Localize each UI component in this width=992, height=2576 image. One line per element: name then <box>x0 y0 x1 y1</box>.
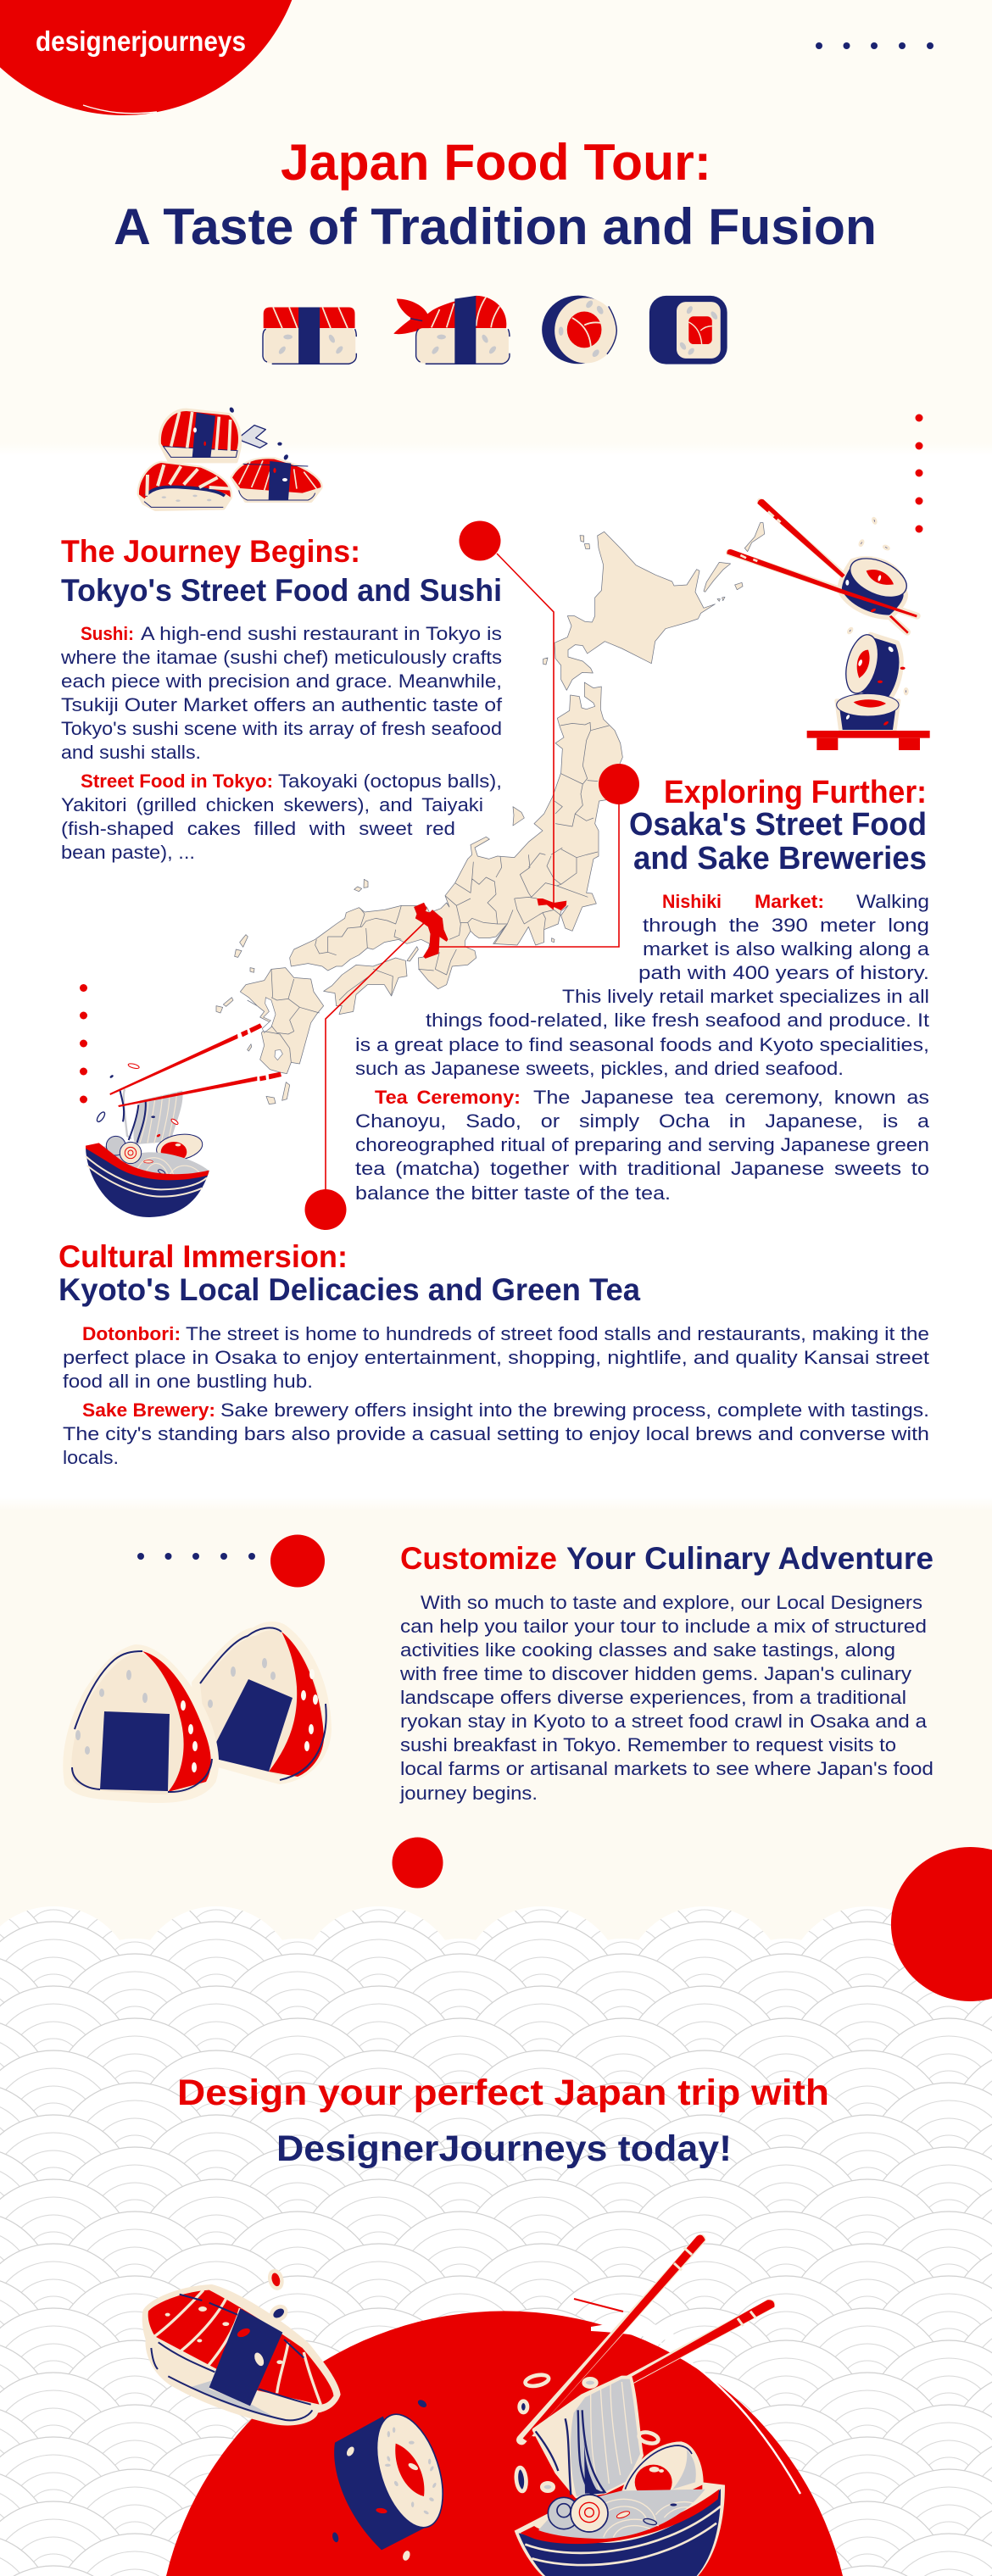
map: prefecture borders <box>248 722 609 1062</box>
text block: Sushi <box>60 623 503 763</box>
text block: customize body: activities like cooking classes and sake tastings, along <box>400 1639 895 1661</box>
text block: Nishiki Market <box>355 891 930 1079</box>
bowl <box>515 2482 725 2576</box>
text block: Street Food in Tokyo <box>61 771 502 863</box>
narutomaki <box>106 1136 142 1164</box>
chopsticks: halo <box>521 2239 770 2440</box>
icon: nigiri <box>263 307 356 364</box>
text block: customize body: journey begins. <box>399 1783 538 1804</box>
roll: top <box>839 551 912 617</box>
logo text: designerjourneys <box>36 25 246 57</box>
marker: Osaka <box>599 764 639 804</box>
map: bays <box>262 998 282 1060</box>
text block: Tea Ceremony: choreographed ritual of preparing and serving Japanese green <box>355 1134 929 1155</box>
text block: Nishiki Market: market is also walking along a <box>643 938 930 960</box>
text block: Nishiki Market: through the 390 meter long <box>643 915 929 936</box>
text block: Street Food in Tokyo: Street Food in Tokyo: <box>81 771 273 792</box>
egg <box>623 2443 702 2503</box>
roll: face <box>365 2406 455 2535</box>
text block: Sake Brewery: The city's standing bars also provide a casual setting to enjoy local brews and converse with <box>63 1423 929 1444</box>
map: Tokyo highlighted <box>537 899 566 910</box>
call to action <box>177 2072 829 2169</box>
text block: Street Food in Tokyo: Yakitori (grilled chicken skewers), and Taiyaki <box>61 794 483 815</box>
text block: Tea Ceremony: Tea Ceremony: <box>375 1087 521 1108</box>
heading: Customize: Customize <box>400 1541 557 1576</box>
text block: Sushi: where the itamae (sushi chef) meticulously crafts <box>60 647 502 668</box>
text block: Tea Ceremony: balance the bitter taste of the tea. <box>355 1182 671 1204</box>
dots: navy customize <box>137 1553 255 1560</box>
text block: Sushi: Tokyo's sushi scene with its array of fresh seafood <box>61 718 502 739</box>
heading: Exploring Further: and Sake Breweries <box>633 841 927 876</box>
big red sun <box>166 2299 843 2576</box>
heading: Exploring Further <box>629 775 927 876</box>
sushi: stripes <box>154 2290 320 2405</box>
text block: customize body: with free time to discover hidden gems. Japan's culinary <box>399 1663 911 1684</box>
background: seigaiha wave pattern <box>0 1899 992 2576</box>
heading: Customize <box>400 1541 933 1576</box>
noodles <box>534 2378 642 2496</box>
map: Hokkaido <box>543 523 765 690</box>
text block: Dotonbori <box>63 1323 929 1392</box>
text block: Sake Brewery: Sake brewery offers insight into the brewing process, complete with tastings. <box>220 1399 929 1421</box>
icon: roll square <box>649 296 727 364</box>
tray <box>807 731 930 750</box>
title: Japan Food Tour: <box>281 134 711 191</box>
heading: Cultural Immersion <box>59 1239 640 1307</box>
text block: Dotonbori: food all in one bustling hub. <box>63 1371 313 1392</box>
illustration: three sushi <box>139 407 320 509</box>
illustration: rolls with chopsticks on tray <box>727 499 930 750</box>
text block: Nishiki Market: path with 400 years of history. <box>638 962 929 983</box>
noodles <box>120 1089 183 1144</box>
red dot: customize <box>270 1534 325 1587</box>
noodle pile <box>100 1145 209 1178</box>
text block: Sake Brewery: Sake Brewery: <box>82 1399 215 1421</box>
text block: Street Food in Tokyo: Takoyaki (octopus balls), <box>278 771 502 792</box>
text block: Dotonbori: The street is home to hundreds of street food stalls and restaurants, making it the <box>186 1323 929 1344</box>
text block: Sushi: and sushi stalls. <box>61 742 201 763</box>
sushi: tuna right <box>232 459 320 501</box>
chopsticks <box>109 1023 281 1107</box>
text block: Tea Ceremony: The Japanese tea ceremony, known as <box>533 1087 929 1108</box>
heading: The Journey Begins <box>61 534 502 608</box>
text block: Tea Ceremony: Chanoyu, Sado, or simply Ocha in Japanese, is a <box>355 1110 930 1132</box>
title: A Taste of Tradition and Fusion <box>114 198 877 255</box>
noodle pile <box>538 2490 705 2539</box>
illustration: onigiri <box>67 1626 327 1799</box>
title <box>114 134 877 255</box>
icon: roll side <box>542 296 617 364</box>
heading: Cultural Immersion: Kyoto's Local Delicacies and Green Tea <box>59 1272 640 1307</box>
text block: Sushi: Tsukiji Outer Market offers an authentic taste of <box>61 694 503 715</box>
drops <box>270 2272 286 2320</box>
heading: Cultural Immersion: Cultural Immersion: <box>59 1239 348 1274</box>
text block: Nishiki Market: This lively retail market specializes in all <box>562 986 929 1007</box>
text block: Sushi: Sushi: <box>81 623 134 644</box>
heading: Exploring Further: Osaka's Street Food <box>629 807 927 843</box>
roll: bottom in cup <box>837 693 899 732</box>
heading: The Journey Begins: The Journey Begins: <box>61 534 360 569</box>
bowl <box>86 1143 209 1217</box>
illustration: ramen bowl with chopsticks <box>515 2235 774 2576</box>
heading: The Journey Begins: Tokyo's Street Food and Sushi <box>61 573 502 608</box>
text block: Nishiki Market: Market: <box>755 891 824 912</box>
text block: Sushi: each piece with precision and grace. Meanwhile, <box>61 670 502 692</box>
droplets <box>847 518 907 694</box>
heading: Exploring Further: Exploring Further: <box>664 775 927 810</box>
roll: body <box>334 2417 431 2550</box>
sushi: shrimp top <box>160 407 289 461</box>
dots: red top right <box>916 414 922 532</box>
text block: customize body: ryokan stay in Kyoto to a street food crawl in Osaka and a <box>400 1711 928 1732</box>
text block: Street Food in Tokyo: bean paste), ... <box>61 842 195 863</box>
call to action: Design your perfect Japan trip with <box>177 2072 829 2113</box>
map: Japan <box>216 523 765 1104</box>
marker: Tokyo <box>460 520 500 561</box>
text block: Sake Brewery: locals. <box>63 1447 119 1468</box>
icons: sushi row <box>263 296 727 364</box>
text block: Tea Ceremony: tea (matcha) together with traditional Japanese sweets to <box>355 1158 929 1179</box>
connector: Osaka <box>437 803 619 947</box>
sushi: fish topping <box>148 2290 333 2405</box>
garnish flakes <box>516 2373 660 2492</box>
marker: Kyoto <box>305 1189 346 1230</box>
illustration: sushi falling <box>142 2272 341 2425</box>
text block: Sake Brewery <box>63 1399 929 1468</box>
sushi: nori band <box>209 2308 282 2406</box>
dots: red left <box>80 984 87 1104</box>
text block: customize body: sushi breakfast in Tokyo. Remember to request visits to <box>400 1734 896 1755</box>
chopsticks: upper sticks <box>727 499 917 634</box>
map: Shikoku <box>324 958 407 1015</box>
map: Kyoto and Osaka highlighted <box>414 903 448 959</box>
text block: customize body: can help you tailor your tour to include a mix of structured <box>400 1616 927 1637</box>
roll: specks <box>332 2398 428 2562</box>
text block: Nishiki Market: is a great place to find seasonal foods and Kyoto specialities, <box>355 1034 929 1055</box>
map: Kyushu <box>240 968 324 1074</box>
illustration: roll on sun <box>332 2398 455 2562</box>
text block: Nishiki Market: such as Japanese sweets, pickles, and dried seafood. <box>355 1058 844 1079</box>
text block: Nishiki Market: Nishiki <box>662 891 722 912</box>
illustration: ramen bowl left <box>86 1023 281 1217</box>
logo circle <box>0 0 292 115</box>
red dot: center <box>392 1838 443 1889</box>
text block: customize body: local farms or artisanal markets to see where Japan's food <box>400 1758 933 1779</box>
text block: Nishiki Market: things food-related, like fresh seafood and produce. It <box>426 1010 929 1031</box>
text block: Nishiki Market: Walking <box>856 891 929 912</box>
connector: Kyoto <box>326 922 425 1192</box>
dots: navy top right <box>816 42 933 49</box>
sushi: rice <box>151 2340 311 2422</box>
map: islands <box>216 807 555 1104</box>
text block: customize body: With so much to taste and explore, our Local Designers <box>421 1592 922 1613</box>
icon: shrimp nigiri <box>393 296 510 364</box>
text block: Dotonbori: perfect place in Osaka to enjoy entertainment, shopping, nightlife, and quality Kansai street <box>63 1347 929 1368</box>
onigiri: right <box>196 1626 327 1780</box>
egg <box>154 1131 204 1164</box>
connector: Tokyo <box>497 554 554 903</box>
roll: middle <box>840 631 906 702</box>
heading: Customize: Your Culinary Adventure <box>566 1541 933 1576</box>
narutomaki <box>548 2495 608 2532</box>
chopsticks: red <box>523 2235 774 2441</box>
red circle: right edge <box>891 1847 992 2001</box>
roll: filling <box>395 2444 424 2496</box>
text block: customize body: landscape offers diverse experiences, from a traditional <box>400 1687 906 1708</box>
chopsticks <box>729 502 917 632</box>
onigiri: left <box>67 1649 215 1799</box>
call to action: DesignerJourneys today! <box>276 2128 732 2169</box>
text block: customize body <box>399 1592 933 1804</box>
text block: Street Food in Tokyo: (fish-shaped cakes filled with sweet red <box>61 818 455 839</box>
map: Honshu <box>290 682 622 989</box>
text block: Dotonbori: Dotonbori: <box>82 1323 181 1344</box>
text block: Sushi: A high-end sushi restaurant in Tokyo is <box>141 623 502 644</box>
garnish specks <box>96 1063 179 1138</box>
sushi: salmon left <box>139 463 231 509</box>
text block: Tea Ceremony <box>355 1087 930 1204</box>
